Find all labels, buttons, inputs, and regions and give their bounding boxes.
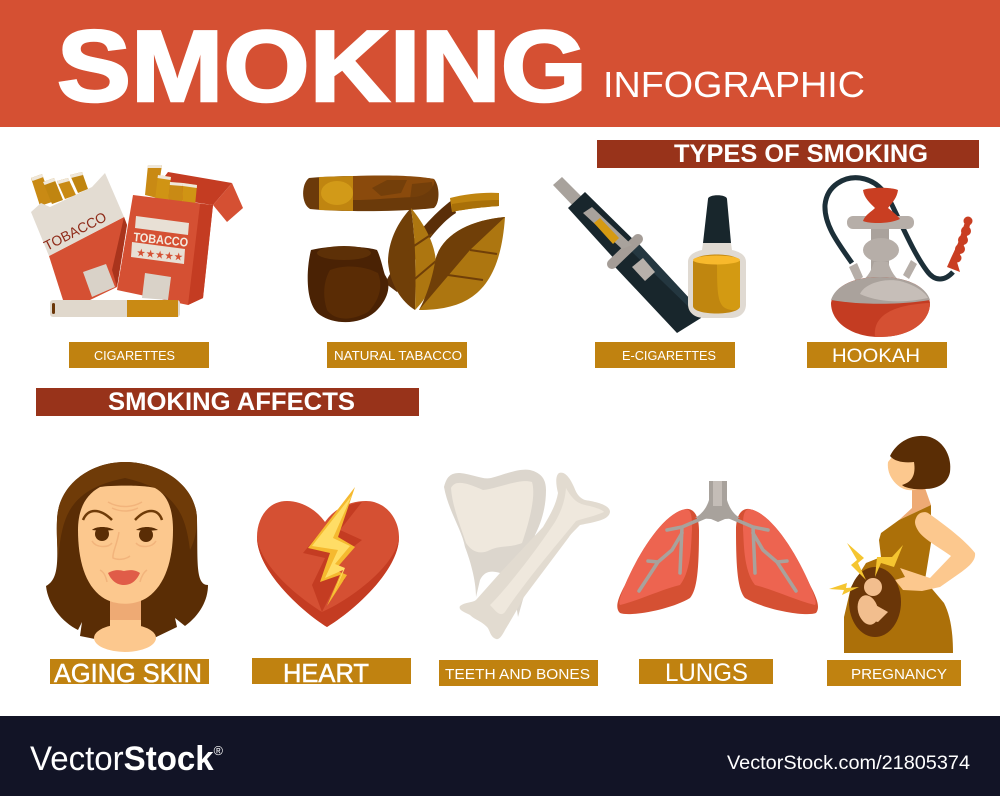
illustration: cigarettes: TOBACCO: [41, 209, 109, 254]
illustration: cigarettes: ★★★★★: [136, 247, 184, 264]
illustration: tooth and bone: [444, 470, 610, 639]
label: cigarettes: CIGARETTES: [94, 349, 175, 363]
label: heart: HEART: [283, 658, 369, 688]
label: lungs: LUNGS: [665, 659, 748, 687]
label: natural tabacco: NATURAL TABACCO: [334, 349, 462, 363]
illustration: hookah: [825, 178, 972, 337]
illustration: lungs: [617, 481, 818, 614]
label: e-cigarettes: [595, 342, 735, 368]
label: hookah: [807, 342, 947, 368]
title: SMOKING: [57, 11, 587, 123]
heading: types of smoking: TYPES OF SMOKING: [674, 140, 928, 168]
label: lungs: [639, 659, 773, 687]
illustration: aging skin face: [46, 462, 208, 652]
header band: [0, 0, 1000, 127]
label: teeth and bones: [439, 660, 598, 686]
heading: smoking affects: SMOKING AFFECTS: [108, 388, 355, 416]
label: teeth and bones: TEETH AND BONES: [445, 666, 590, 683]
illustration: cigarettes: [31, 165, 243, 317]
footer band: [0, 716, 1000, 796]
illustration: broken heart: [257, 487, 399, 627]
label: heart: [252, 658, 411, 688]
heading: smoking affects: [36, 388, 419, 416]
label: natural tabacco: [327, 342, 467, 368]
illustration: natural tobacco: [303, 175, 505, 322]
label: pregnancy: PREGNANCY: [851, 666, 947, 683]
illustration: e-cigarette and liquid: [553, 177, 746, 333]
illustration: cigarettes: TOBACCO: [133, 230, 189, 250]
subtitle: INFOGRAPHIC: [603, 64, 865, 105]
footer logo: ®: [214, 743, 223, 758]
label: pregnancy: [827, 660, 961, 686]
label: hookah: HOOKAH: [832, 346, 920, 367]
label: cigarettes: [69, 342, 209, 368]
footer url: VectorStock.com/21805374: [727, 753, 970, 774]
illustration: pregnancy: [829, 436, 975, 653]
heading: types of smoking: [597, 140, 979, 168]
label: aging skin: AGING SKIN: [54, 658, 202, 688]
label: e-cigarettes: E-CIGARETTES: [622, 349, 716, 363]
footer logo: VectorStock: [30, 740, 216, 778]
